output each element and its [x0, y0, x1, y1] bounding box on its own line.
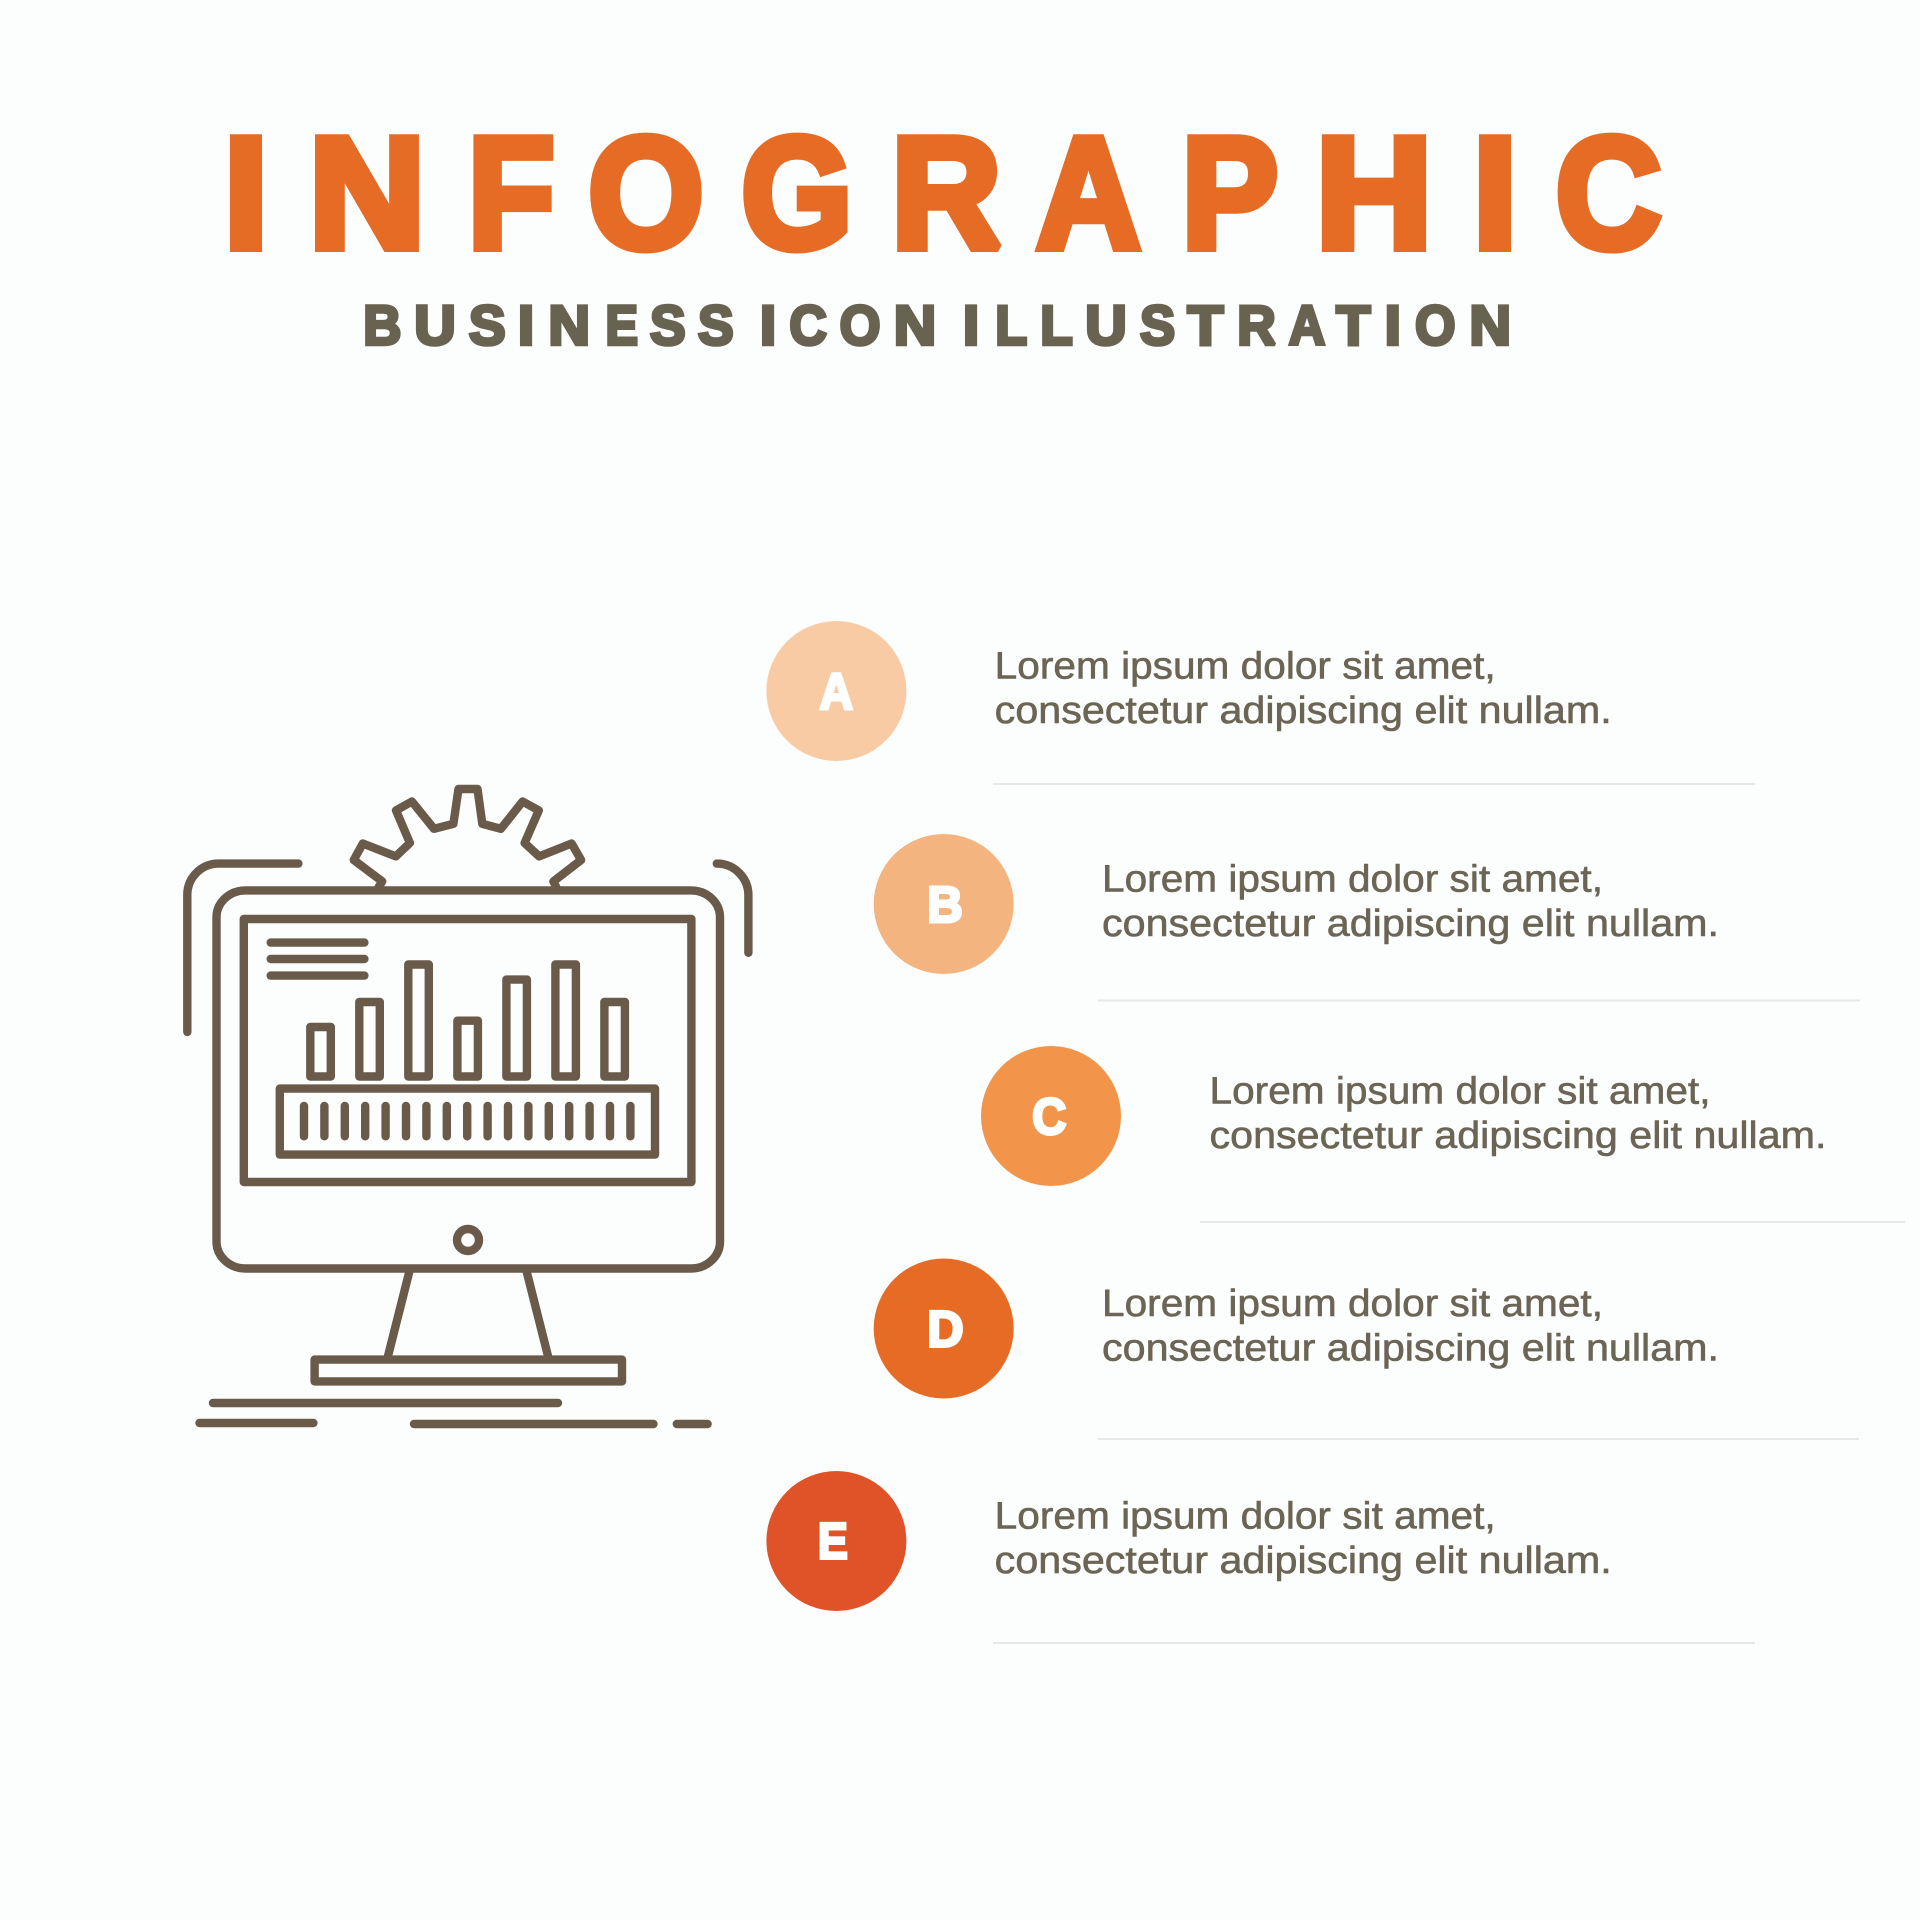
item D [874, 1258, 1859, 1439]
icon part: tick panel [280, 1089, 655, 1155]
subtitle: N [894, 295, 936, 357]
badge E [766, 1471, 906, 1611]
title: I [1473, 104, 1517, 281]
subtitle: T [1188, 295, 1223, 357]
icon part: monitor body [216, 890, 720, 1268]
badge A [766, 621, 906, 761]
subtitle: I [963, 295, 979, 357]
text B: Lorem ipsum dolor sit amet, [1102, 858, 1603, 900]
subtitle: I [760, 295, 776, 357]
text C: consectetur adipiscing elit nullam. [1210, 1115, 1826, 1157]
subtitle: I [518, 295, 534, 357]
text E: consectetur adipiscing elit nullam. [995, 1540, 1612, 1582]
icon part: text lines [271, 943, 364, 976]
badge A: A [820, 664, 853, 721]
icon part: bar chart [310, 964, 625, 1076]
icon part: gear [354, 789, 581, 887]
badge E: E [818, 1514, 848, 1570]
subtitle: I [1385, 295, 1401, 357]
badge D [874, 1258, 1014, 1398]
subtitle: N [1469, 295, 1511, 357]
text A: Lorem ipsum dolor sit amet, [995, 646, 1496, 688]
title: H [1316, 104, 1432, 281]
title: O [588, 105, 704, 282]
subtitle: L [1040, 294, 1073, 357]
text D: consectetur adipiscing elit nullam. [1102, 1328, 1719, 1370]
title: I [224, 104, 268, 281]
subtitle: E [606, 294, 638, 357]
title: R [891, 105, 1001, 281]
text B: consectetur adipiscing elit nullam. [1102, 903, 1719, 945]
item E [766, 1471, 1755, 1643]
title: P [1182, 105, 1278, 282]
subtitle: T [1336, 293, 1370, 356]
subtitle [363, 293, 1511, 357]
subtitle: L [995, 295, 1027, 357]
icon part: right bracket [717, 864, 748, 953]
subtitle: S [1140, 294, 1175, 357]
subtitle: U [1085, 295, 1127, 357]
subtitle: C [789, 295, 827, 357]
item B [874, 834, 1860, 1000]
subtitle: U [414, 295, 456, 357]
title: N [309, 105, 425, 281]
badge C [981, 1046, 1121, 1186]
icon: monitor with gear and bar chart [187, 789, 748, 1424]
subtitle: O [840, 294, 880, 357]
subtitle: S [650, 293, 686, 357]
subtitle: R [1237, 293, 1276, 357]
text E: Lorem ipsum dolor sit amet, [995, 1496, 1496, 1538]
subtitle: S [469, 294, 506, 356]
subtitle: N [548, 295, 590, 357]
title: C [1556, 105, 1661, 282]
badge D: D [927, 1300, 964, 1358]
subtitle: B [363, 294, 401, 357]
icon part: base [315, 1360, 622, 1381]
icon part: power button [457, 1229, 479, 1251]
badge C: C [1032, 1088, 1066, 1145]
subtitle: A [1289, 295, 1325, 357]
item C [981, 1046, 1905, 1222]
icon part: screen [244, 919, 691, 1182]
title: G [741, 105, 852, 281]
text D: Lorem ipsum dolor sit amet, [1102, 1283, 1603, 1325]
title: A [1037, 105, 1140, 282]
subtitle: O [1415, 295, 1456, 357]
icon part: left bracket [187, 864, 298, 1032]
icon part: ground lines [200, 1403, 708, 1424]
badge B [874, 834, 1014, 974]
text C: Lorem ipsum dolor sit amet, [1210, 1070, 1710, 1112]
text A: consectetur adipiscing elit nullam. [995, 690, 1612, 732]
subtitle: S [698, 293, 734, 357]
badge B: B [927, 876, 963, 933]
icon part: stand [388, 1271, 548, 1358]
item A [766, 621, 1755, 784]
title [224, 104, 1661, 282]
title: F [468, 104, 554, 281]
